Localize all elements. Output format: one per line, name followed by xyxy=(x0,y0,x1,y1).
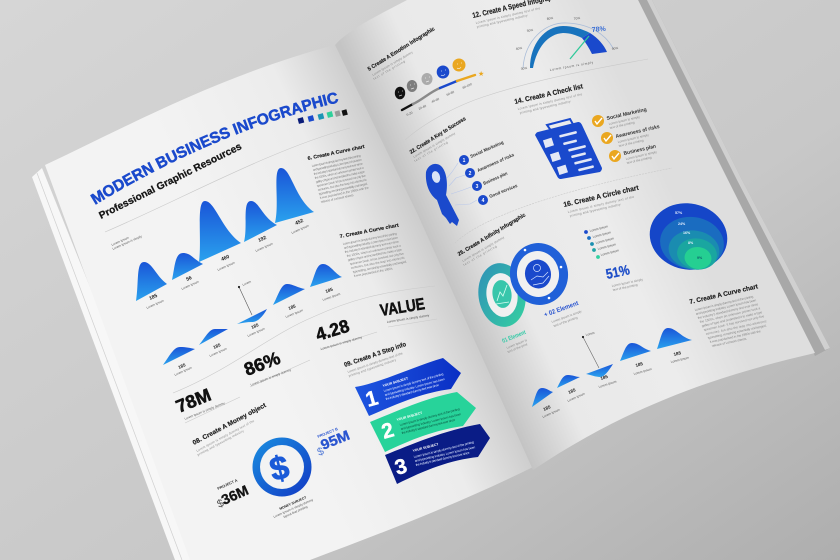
step 2: and typesetting industry. Lorem Ipsum has been xyxy=(400,412,462,431)
ring captions: 01 Element xyxy=(502,330,527,345)
text block: section 7 xyxy=(339,223,407,278)
money subject caption: layout that printing xyxy=(283,505,308,519)
step 1: the industry's standard dummy text ever since xyxy=(385,383,440,401)
chart: curve chart bottom: 185 xyxy=(288,303,297,311)
check item 2: Awareness of risks xyxy=(615,124,660,140)
gauge chart: 30% xyxy=(520,66,528,71)
chart: nested circles xyxy=(643,196,734,277)
step 1: and typesetting industry. Lorem Ipsum has been xyxy=(384,377,445,397)
chart: curve chart right page: Lorem Ipsum xyxy=(598,379,617,389)
text block: section 6: release of Letraset sheets. xyxy=(320,193,355,204)
legend: Lorem Ipsum xyxy=(589,224,609,233)
section: infinity infographic xyxy=(457,212,583,354)
chart: nested circles: 8% xyxy=(688,241,694,245)
chart: curve chart bottom: Lorem Ipsum xyxy=(174,366,193,377)
chart: curve chart top: Lorem Ipsum xyxy=(146,299,165,310)
chart: curve chart bottom: Lorem xyxy=(242,279,252,287)
stat: 78M xyxy=(173,385,226,421)
numbered items xyxy=(459,140,519,205)
icon: clipboard xyxy=(535,119,602,179)
section: emotion infographic: text of the printing xyxy=(372,59,406,81)
chart: curve chart right page: 185 xyxy=(635,361,644,368)
chart: curve chart top: Lorem Ipsum xyxy=(181,280,200,291)
step 3 xyxy=(385,424,490,484)
chart: curve chart top: 452 xyxy=(294,218,305,227)
step 2 xyxy=(370,392,476,452)
chart: nested circles: 57% xyxy=(675,211,683,215)
stat: 4.28: 4.28 xyxy=(313,316,352,345)
infinity ring right xyxy=(505,238,573,310)
gauge chart: 78% xyxy=(592,26,607,34)
infinity ring left xyxy=(474,260,530,330)
stat: 4.28 xyxy=(313,316,363,351)
stat: 86%: 86% xyxy=(241,348,283,380)
numbered items: 4 xyxy=(482,198,485,204)
section: emotion infographic: Lorem Ipsum is simply dummy xyxy=(372,50,414,77)
project B: 95M xyxy=(318,427,352,453)
text block: section 7 right: galley of type and scrambled it to make a type xyxy=(701,310,763,328)
chart: curve chart top: Lorem Ipsum xyxy=(111,236,130,247)
chart: curve chart top: 192 xyxy=(257,235,268,244)
text block: section 7 right: typesetting, remaining essentially unchanged. xyxy=(707,324,767,340)
section: speed infographic: printing and typesetting industry xyxy=(476,13,528,29)
text block: section 7: It was popularised in the 1960s. xyxy=(353,266,394,278)
check item 2: text of the printing xyxy=(618,138,644,148)
numbered items: Good services xyxy=(489,183,519,199)
stat: 51%: text of the printing xyxy=(612,283,638,292)
project A: 36M xyxy=(219,482,251,508)
check item 3: Lorem Ipsum is simply xyxy=(625,150,658,161)
chart: curve chart bottom: Lorem Ipsum xyxy=(209,347,228,358)
check item 1: text of the printing xyxy=(609,120,635,130)
project A: PROJECT A xyxy=(217,478,238,491)
text block: section 7 right: the 1500s, when an unknown printer took a xyxy=(699,306,761,324)
section 08: money object: printing and typesetting industry xyxy=(197,429,245,457)
section: key to success: 22. Create A Key to Success xyxy=(409,116,467,156)
text block: section 7: Lorem Ipsum is simply dummy text of the printing xyxy=(342,232,397,246)
section: circle chart: printing and typesetting industry xyxy=(569,202,621,218)
gauge chart: Lorem Ipsum is simply xyxy=(549,60,594,72)
check item 3: Business plan xyxy=(623,144,657,157)
ring captions: text of the print xyxy=(507,342,528,354)
ring captions xyxy=(502,300,583,354)
text block: section 7 right: 7. Create A Curve chart xyxy=(689,283,759,306)
step 1 xyxy=(355,358,461,416)
scale labels: 60-80 xyxy=(446,90,455,97)
stat: 4.28: Lorem Ipsum is simply dummy xyxy=(320,335,363,351)
text block: section 7 right: Lorem Ipsum is simply dummy text of the printing xyxy=(694,295,754,312)
text block: section 6 xyxy=(307,144,369,204)
section: emotion infographic xyxy=(367,26,484,117)
text block: section 6: centuries, but also the leap into electronic xyxy=(317,178,368,192)
check item 1: Lorem Ipsum is simply xyxy=(608,115,641,126)
chart: curve chart top: 185 xyxy=(148,293,159,302)
section: emotion infographic: 5 Create A Emotion infographic xyxy=(367,26,436,73)
ring captions: Lorem Ipsum is simply xyxy=(551,309,583,324)
chart: curve chart top: 460 xyxy=(220,254,231,263)
project B xyxy=(316,427,352,459)
step 2: the industry's standard dummy text ever since xyxy=(401,418,456,435)
text block: section 7: specimen book. It has survived not only five xyxy=(349,252,404,266)
emotion scale bar xyxy=(402,75,475,110)
chart: curve chart top: Lorem Ipsum is simply xyxy=(112,234,143,251)
text block: section 6: galley of type and scrambled it to make a type xyxy=(315,170,365,184)
chart: curve chart right page: 185 xyxy=(600,374,609,381)
step 3: YOUR SUBJECT xyxy=(412,442,440,453)
gauge chart xyxy=(515,16,619,72)
chart: curve chart bottom: Lorem Ipsum xyxy=(285,308,304,319)
text block: section 6: Lorem Ipsum is simply dummy text of the printing xyxy=(311,154,361,168)
text block: section 7: 7. Create A Curve chart xyxy=(339,223,400,240)
check item 2: Lorem Ipsum is simply xyxy=(617,133,650,144)
chart: curve chart right page: 185 xyxy=(673,350,682,357)
chart: curve chart bottom: 185 xyxy=(250,322,260,330)
step 3: Lorem Ipsum is simply dummy text of the printing xyxy=(413,440,475,459)
text block: section 6: 6. Create A Curve chart xyxy=(307,144,365,162)
key connector lines xyxy=(447,163,477,205)
icon: star: ★ xyxy=(478,70,484,78)
chart: curve chart bottom: Lorem Ipsum xyxy=(247,327,266,338)
step 2: Lorem Ipsum is simply dummy text of the printing xyxy=(399,407,460,427)
step 2: 2 xyxy=(379,418,397,444)
chart: curve chart bottom: 185 xyxy=(177,362,187,370)
section 09: 3 step info xyxy=(343,341,490,484)
section: infinity infographic: 25. Create A Infinity Infographic xyxy=(457,212,527,258)
chart: curve chart right page: 185 xyxy=(542,404,552,412)
chart: curve chart right page xyxy=(532,328,692,419)
text block: section 6: typesetting, remaining essentially unchanged. xyxy=(318,182,368,196)
numbered items: 2 xyxy=(469,171,472,177)
section 09: 3 step info: 09. Create A 3 Step info xyxy=(343,341,407,369)
text block: section 7: centuries, but also the leap into electronic xyxy=(350,255,406,270)
scale labels: 20-40 xyxy=(418,104,427,111)
section 08: money object: Lorem Ipsum is simply dummy text of the xyxy=(196,419,255,453)
section: key to success xyxy=(409,116,519,226)
numbered items: Business plan xyxy=(482,171,508,186)
icon: dollar coin: $ xyxy=(266,448,293,488)
chart: nested circles: 16% xyxy=(683,231,691,235)
gauge chart: 50% xyxy=(526,28,534,33)
chart: curve chart right page: Lorem Ipsum xyxy=(670,356,690,364)
chart: curve chart right page: Lorem Ipsum xyxy=(633,367,652,376)
project A: $ xyxy=(215,497,226,511)
scale labels: 80-100 xyxy=(462,82,473,90)
section 09: 3 step info: printing and typesetting industry xyxy=(348,358,397,378)
chart: curve chart top: 56 xyxy=(185,275,193,283)
text block: section 7: the industry's standard dummy text ever since xyxy=(344,240,399,254)
text block: section 7: and typesetting industry. Lorem Ipsum has been xyxy=(343,236,398,250)
chart: curve chart right page: Lorem Ipsum xyxy=(542,408,561,419)
chart: nested circles: 9% xyxy=(697,256,703,260)
left page content xyxy=(90,92,490,519)
stat: 51%: Lorem Ipsum is simply xyxy=(611,277,644,288)
section: circle chart xyxy=(563,185,734,292)
scale labels: 0-20 xyxy=(406,111,413,117)
text block: section 7: galley of type and scrambled it to make a type xyxy=(347,248,402,262)
section 08: money object xyxy=(192,402,352,519)
gauge chart: 70% xyxy=(573,16,581,21)
ring captions: Lorem Ipsum is xyxy=(506,338,528,350)
step 3: 3 xyxy=(392,455,410,480)
section: circle chart: 16. Create A Circle chart xyxy=(563,185,640,209)
subtitle: Professional Graphic Resources xyxy=(97,141,244,222)
step 2: YOUR SUBJECT xyxy=(396,411,424,422)
chart: curve chart top: Lorem Ipsum xyxy=(217,261,236,272)
check item 3 xyxy=(609,144,658,165)
section: check list xyxy=(514,83,660,179)
stat: VALUE: Lorem Ipsum is simply dummy xyxy=(387,313,430,324)
legend: Lorem Ipsum xyxy=(597,242,617,251)
stat: 51%: 51% xyxy=(604,261,632,282)
legend: Lorem Ipsum xyxy=(600,248,620,257)
text block: section 7 right: and typesetting industry. Lorem Ipsum has been xyxy=(695,298,757,316)
project B: PROJECT B xyxy=(317,427,339,439)
check item 1 xyxy=(592,107,647,130)
numbered items: 1 xyxy=(463,158,466,164)
chart: curve chart top: Lorem Ipsum xyxy=(255,242,274,253)
money subject caption: MONEY SUBJECT xyxy=(279,495,308,511)
section: speed infographic: Lorem Ipsum is simply dummy text of the xyxy=(475,6,541,25)
stat: 78M: 78M xyxy=(173,385,214,417)
scale labels xyxy=(406,82,473,117)
check item 3: text of the printing xyxy=(626,155,652,165)
chart: curve chart bottom: 185 xyxy=(212,342,222,350)
check item 1: Social Marketing xyxy=(606,107,647,122)
check item 2 xyxy=(601,124,660,148)
section: check list: Lorem Ipsum is simply dummy text of the xyxy=(517,92,583,111)
numbered items: Awareness of risks xyxy=(476,152,515,173)
ring captions: text of the printing xyxy=(553,315,578,328)
text block: section 7 right xyxy=(689,283,767,348)
stat: 86% xyxy=(241,348,292,387)
colour swatches xyxy=(298,109,348,124)
chart: curve chart bottom xyxy=(163,264,342,377)
chart: curve chart bottom: 185 xyxy=(325,287,334,294)
chart: nested circles: 24% xyxy=(678,222,686,226)
stat: 51% xyxy=(604,261,644,292)
text block: section 7 right: It was popularised in the 1960s with the xyxy=(709,329,761,344)
section: check list: printing and typesetting industry xyxy=(519,99,571,115)
step 1: Lorem Ipsum is simply dummy text of the printing xyxy=(383,372,444,393)
text block: section 6: the industry's standard dummy text ever since xyxy=(313,162,363,176)
gauge chart: 60% xyxy=(546,16,554,21)
legend: Lorem Ipsum xyxy=(592,230,612,239)
numbered items: Social Marketing xyxy=(469,140,504,159)
text block: section 7: typesetting, remaining essentially unchanged. xyxy=(352,260,407,274)
left page xyxy=(45,45,533,560)
numbered items: 3 xyxy=(476,184,479,190)
section: check list: 14. Create A Check list xyxy=(514,83,584,106)
text block: section 7 right: release of Letraset sheets. xyxy=(711,337,748,348)
legend xyxy=(584,224,620,259)
text block: section 6: the 1500s, when an unknown printer took a xyxy=(314,166,364,180)
text block: section 7 right: the industry's standard dummy text ever since xyxy=(697,302,759,320)
project B: $ xyxy=(316,445,326,459)
icon: dollar coin xyxy=(252,438,312,496)
section: circle chart: Lorem Ipsum is simply dummy text of the xyxy=(567,195,635,214)
chart: curve chart top xyxy=(111,168,314,310)
scale labels: 40-60 xyxy=(431,97,440,104)
text block: section 6: and typesetting industry. Lorem Ipsum has been xyxy=(312,158,362,172)
title: MODERN BUSINESS INFOGRAPHIC xyxy=(90,92,338,205)
gauge chart: 40% xyxy=(515,46,523,51)
step 3: and typesetting industry. Lorem Ipsum has been xyxy=(414,445,476,463)
chart: curve chart bottom: Lorem Ipsum xyxy=(322,292,341,302)
stat: 78M: Lorem Ipsum is simply dummy xyxy=(184,401,226,421)
legend: Lorem Ipsum xyxy=(595,236,615,245)
right page content xyxy=(367,0,767,419)
text block: section 6: It was popularised in the 1960s with the xyxy=(319,186,369,200)
text block: section 6: specimen book. It has survived not only five xyxy=(316,174,366,188)
chart: curve chart right page: 185 xyxy=(567,387,577,395)
stat: VALUE: VALUE xyxy=(379,295,426,320)
section: infinity infographic: text of the printing xyxy=(462,244,498,267)
chart: curve chart right page: Lorem Ipsum xyxy=(567,392,586,403)
section: key to success: text of the printing xyxy=(414,140,449,163)
money subject caption: Lorem Ipsum is simply dummy xyxy=(273,498,314,519)
right page xyxy=(335,0,815,470)
section 08: money object: 08. Create A Money object xyxy=(192,402,268,447)
section: key to success: Lorem Ipsum is simply dummy xyxy=(412,131,456,159)
icon: emotion faces xyxy=(395,58,466,99)
icon: key xyxy=(426,164,459,226)
chart: curve chart right page: Lorem xyxy=(585,331,595,337)
text block: section 7: the 1500s, when an unknown printer took a xyxy=(346,244,401,258)
chart: curve chart top: Lorem Ipsum xyxy=(291,224,310,235)
ring captions: + 02 Element xyxy=(543,300,580,319)
step 1: 1 xyxy=(363,386,381,412)
step 1: YOUR SUBJECT xyxy=(382,376,410,388)
text block: section 7 right: centuries, but also the leap into electronic xyxy=(705,319,767,336)
section: infinity infographic: Lorem Ipsum is simply dummy xyxy=(462,235,505,263)
step 3: the industry's standard dummy text ever since xyxy=(415,451,470,467)
gauge chart: 90% xyxy=(611,46,619,51)
text block: section 7 right: specimen book. It has survived not only five xyxy=(703,314,765,332)
stat: 86%: Lorem Ipsum is simply dummy xyxy=(250,368,292,387)
section: speed infographic xyxy=(471,0,619,72)
section 09: 3 step info: Lorem Ipsum is simply dummy text of the xyxy=(347,351,403,374)
